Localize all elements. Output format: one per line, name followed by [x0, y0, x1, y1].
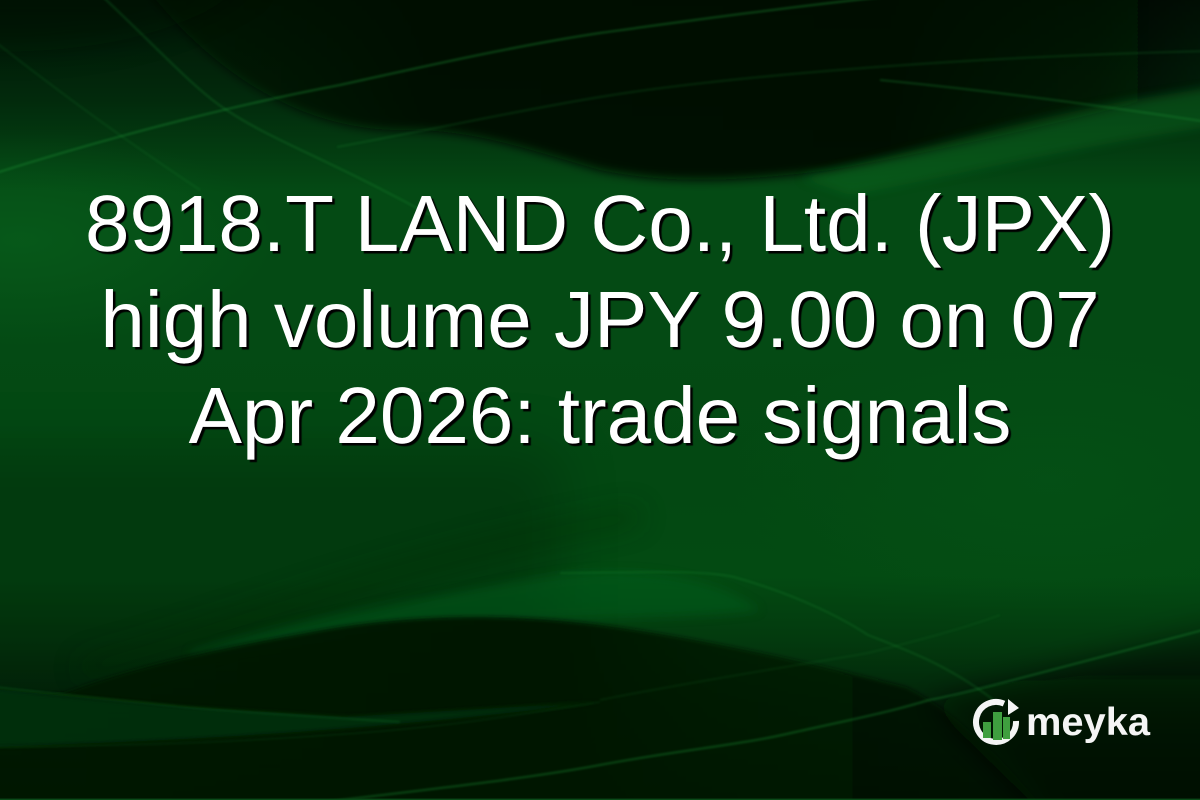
title — [85, 179, 1115, 462]
title: 8918.T LAND Co., Ltd. (JPX) — [85, 179, 1115, 268]
title: Apr 2026: trade signals — [189, 371, 1011, 460]
title: high volume JPY 9.00 on 07 — [100, 275, 1100, 364]
logo: meyka — [972, 698, 1150, 745]
icon: circular arrow with bars — [976, 699, 1019, 742]
wordmark: meyka — [1026, 701, 1150, 744]
